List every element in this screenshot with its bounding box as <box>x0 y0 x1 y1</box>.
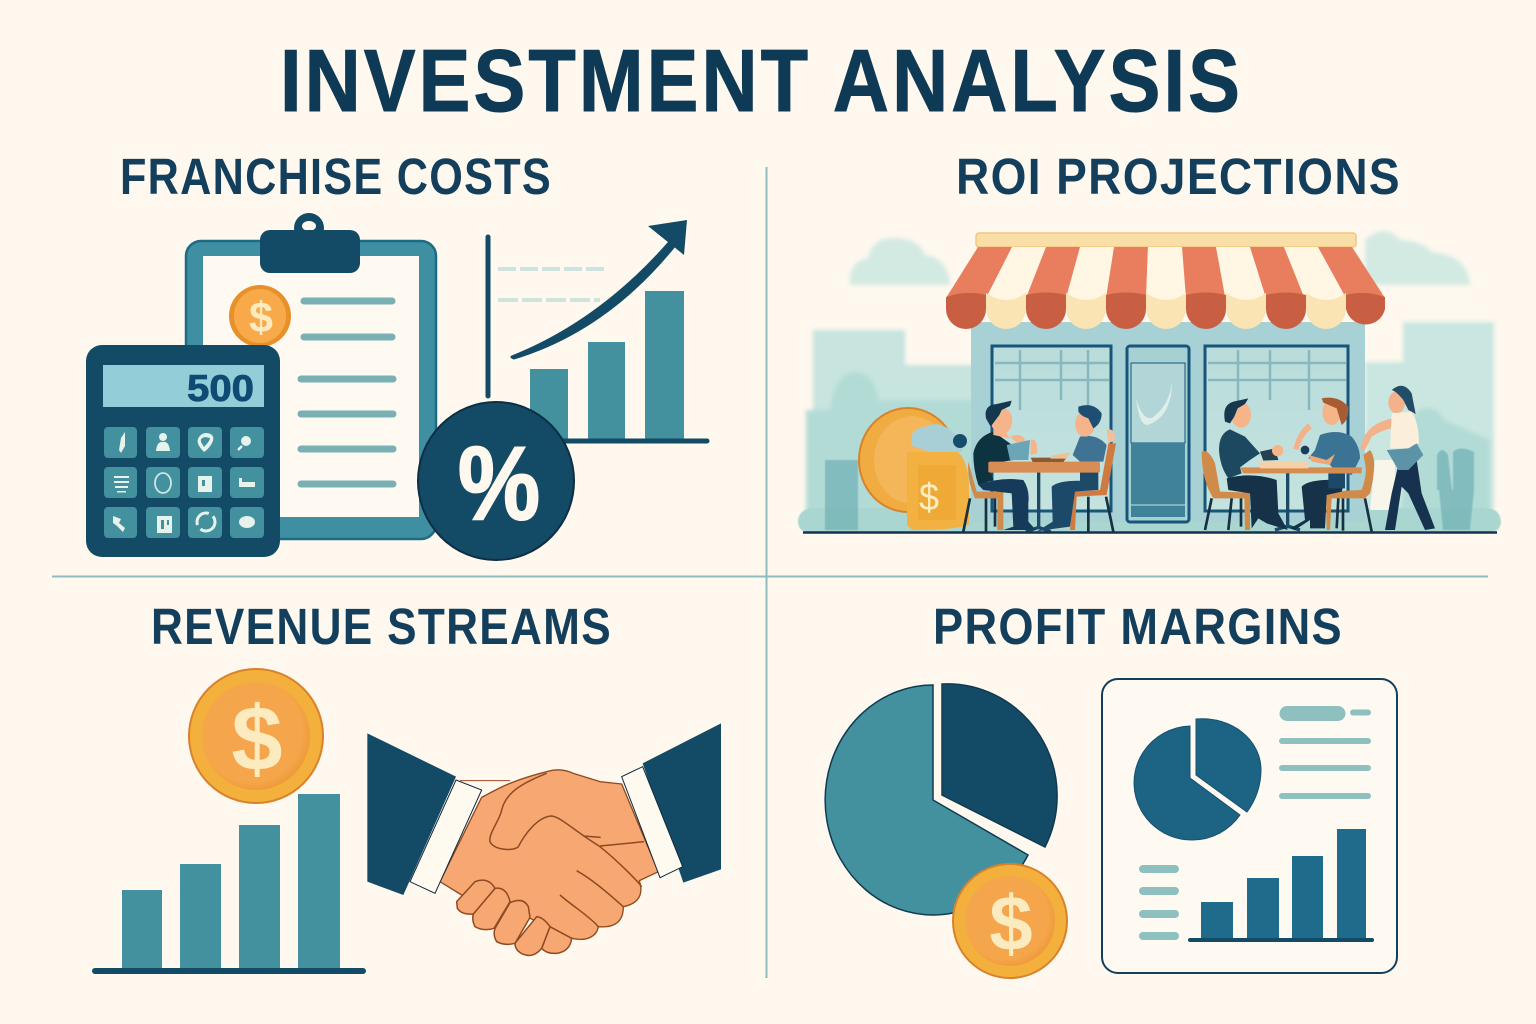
waiter <box>1370 460 1395 510</box>
coin and money jar: $ <box>919 477 939 519</box>
icon: large dollar coin: $ <box>231 688 283 790</box>
large pie chart <box>825 684 1057 915</box>
potted plants <box>825 448 1474 530</box>
icon: small dollar coin <box>229 285 291 347</box>
left chair <box>1202 451 1250 530</box>
heading: profit margins: PROFIT MARGINS <box>933 598 1343 655</box>
icon: calculator <box>86 345 280 557</box>
table top <box>988 462 1100 473</box>
icon: small dollar coin: $ <box>249 294 273 342</box>
cafe table and two seated people, left <box>963 401 1116 532</box>
left chair <box>968 462 1003 530</box>
calculator display: 500 <box>187 368 254 409</box>
icon: dollar coin: $ <box>989 879 1033 967</box>
panel: ROI projections storefront scene <box>798 231 1501 532</box>
right window <box>1205 346 1348 511</box>
legend lines <box>1143 712 1368 936</box>
left person <box>978 479 1036 530</box>
heading: franchise costs: FRANCHISE COSTS <box>120 148 552 205</box>
panel: revenue streams illustration <box>92 669 721 974</box>
icon: percent badge: % <box>458 426 540 542</box>
coin and money jar <box>859 408 969 530</box>
right person <box>1290 480 1345 530</box>
icon: percent badge <box>418 402 574 560</box>
small pie chart <box>1134 719 1261 840</box>
ground line <box>803 531 1497 534</box>
ground <box>798 508 1501 532</box>
fingers <box>542 927 572 953</box>
small bar chart <box>1188 829 1374 942</box>
bar chart <box>92 794 366 974</box>
cafe table, two seated people and waiter, right <box>1202 386 1435 532</box>
right person <box>1037 481 1097 532</box>
calculator keys <box>104 427 264 538</box>
table pole <box>1275 470 1300 530</box>
table pole <box>1026 470 1051 532</box>
title: INVESTMENT ANALYSIS <box>280 31 1243 130</box>
panel: profit margins illustration <box>825 679 1397 978</box>
awning <box>946 233 1385 329</box>
panel: franchise costs illustration <box>86 213 707 560</box>
icon: large dollar coin <box>189 669 323 803</box>
heading: ROI projections: ROI PROJECTIONS <box>956 148 1401 205</box>
left window <box>992 346 1111 511</box>
building <box>971 322 1365 522</box>
report card <box>1102 679 1397 973</box>
right chair <box>1326 450 1374 530</box>
right chair <box>1070 443 1116 530</box>
bar chart with rising arrow <box>488 220 707 441</box>
table top <box>1240 467 1362 473</box>
icon: clipboard <box>186 213 436 539</box>
background clouds and city <box>806 231 1494 520</box>
icon: handshake <box>367 723 721 955</box>
calculator display <box>103 365 264 409</box>
calculator key glyphs <box>113 432 255 533</box>
left person <box>1227 475 1288 530</box>
door <box>1127 346 1189 522</box>
heading: revenue streams: REVENUE STREAMS <box>151 598 612 655</box>
icon: dollar coin <box>953 864 1067 978</box>
